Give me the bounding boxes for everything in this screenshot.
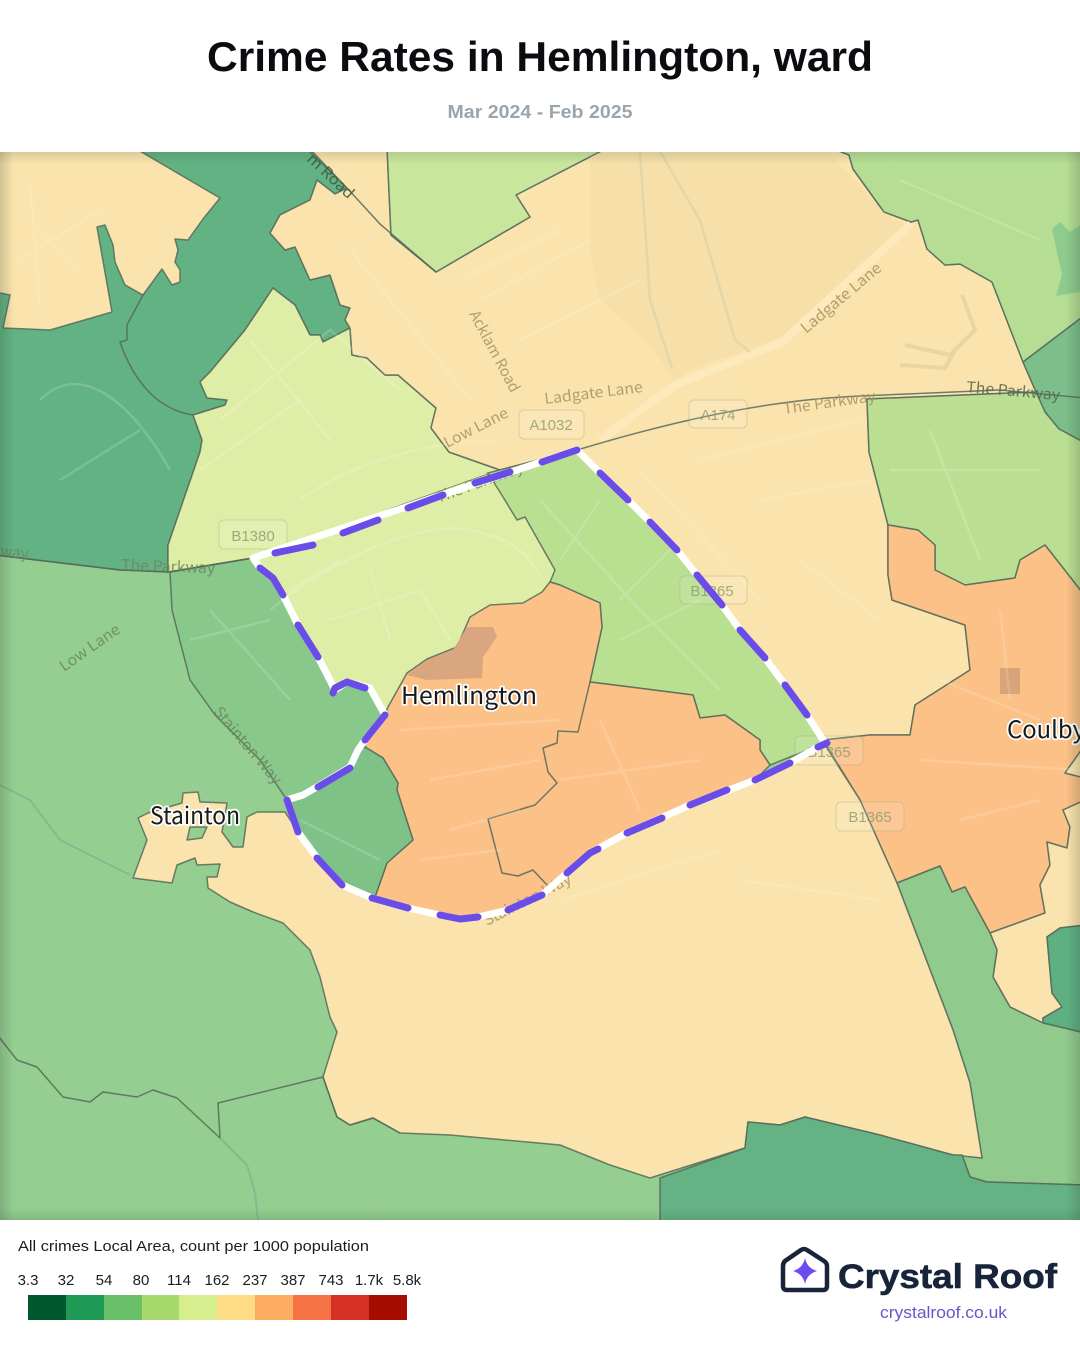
legend tick values: 3.3 bbox=[18, 1272, 38, 1289]
choropleth map bbox=[0, 147, 1080, 1225]
road labels: way bbox=[0, 540, 30, 564]
region: north-west pale green bbox=[168, 288, 500, 572]
region: ward west green bbox=[170, 558, 385, 800]
road shields bbox=[219, 400, 904, 831]
icon: house with star bbox=[783, 1249, 827, 1290]
road labels: Stainton Way bbox=[480, 868, 575, 930]
region: ward mid green bbox=[488, 450, 825, 765]
legend tick values bbox=[18, 1272, 422, 1289]
region: top-left cream bbox=[0, 147, 220, 330]
legend tick values: 162 bbox=[204, 1272, 230, 1289]
website: crystalroof.co.uk bbox=[880, 1304, 1008, 1322]
region: north darker farmland bbox=[590, 153, 888, 214]
region: Stainton green hole bbox=[187, 827, 207, 840]
road shields: A174 bbox=[700, 407, 736, 424]
road labels: Low Lane bbox=[440, 402, 512, 452]
legend title: All crimes Local Area, count per 1000 population bbox=[18, 1238, 369, 1255]
region: north-west dark green bbox=[0, 147, 350, 572]
icon: east darker block bbox=[1000, 668, 1020, 694]
region: east green bbox=[867, 392, 1080, 596]
road shields: B1365 bbox=[807, 744, 851, 761]
region: north cream bbox=[270, 147, 1036, 740]
region: south-east green bbox=[897, 866, 1080, 1185]
road labels: Stainton Way bbox=[209, 702, 287, 789]
road labels: Acklam Road bbox=[465, 306, 525, 396]
legend tick values: 237 bbox=[242, 1272, 268, 1289]
legend tick values: 743 bbox=[318, 1272, 344, 1289]
road labels: The Parkway bbox=[121, 554, 216, 578]
road shields: B1380 bbox=[231, 528, 275, 545]
road shields: A1032 bbox=[529, 417, 573, 434]
legend tick values: 32 bbox=[58, 1272, 74, 1289]
legend tick values: 54 bbox=[96, 1272, 112, 1289]
legend bbox=[18, 1238, 422, 1320]
thin boundaries and streams bbox=[0, 188, 1080, 1220]
region: east cream sliver bbox=[1064, 751, 1080, 778]
region: east orange bbox=[823, 525, 1080, 933]
place labels bbox=[150, 676, 1080, 831]
road texture bbox=[20, 152, 1080, 900]
legend tick values: 387 bbox=[280, 1272, 306, 1289]
road labels: Low Lane bbox=[55, 619, 124, 676]
wordmark: Crystal Roof bbox=[838, 1258, 1058, 1296]
legend tick values: 5.8k bbox=[393, 1272, 422, 1289]
road shields: B1365 bbox=[848, 809, 892, 826]
legend tick values: 1.7k bbox=[355, 1272, 384, 1289]
region: south dark green bbox=[660, 1117, 1080, 1225]
region: ward south-west green bbox=[287, 747, 413, 897]
region: east cream pocket bbox=[990, 800, 1080, 1023]
road labels: Ladgate Lane bbox=[796, 257, 886, 338]
logo: Crystal Roof bbox=[783, 1249, 1058, 1322]
road labels bbox=[0, 148, 1061, 930]
road shields: B1365 bbox=[690, 583, 734, 600]
region: far east green bbox=[1023, 315, 1080, 443]
legend tick values: 114 bbox=[167, 1272, 191, 1289]
region: ward brown patch bbox=[407, 627, 497, 680]
place labels: Stainton bbox=[150, 796, 240, 831]
region: north pale green bbox=[387, 147, 609, 272]
region: north-east dark strip bbox=[1052, 222, 1080, 296]
legend colour bar bbox=[28, 1295, 407, 1320]
region: east dark pocket bbox=[1043, 925, 1080, 1033]
region: ward orange subdivisions bbox=[488, 682, 590, 885]
subtitle: date range: Mar 2024 - Feb 2025 bbox=[448, 101, 632, 122]
region: ward orange bbox=[365, 582, 770, 919]
region: ward pale green bbox=[253, 470, 555, 715]
map edge shading bbox=[0, 152, 1080, 1220]
title: Crime Rates in Hemlington, ward bbox=[207, 33, 873, 80]
place labels: Hemlington bbox=[401, 676, 537, 711]
region: north-east green bbox=[829, 147, 1080, 362]
road labels: The Parkway bbox=[433, 456, 526, 508]
region: south cream bbox=[133, 742, 982, 1178]
road labels: The Parkway bbox=[966, 376, 1061, 405]
ward boundary bbox=[253, 450, 827, 919]
road labels: Ladgate Lane bbox=[543, 376, 644, 409]
legend tick values: 80 bbox=[133, 1272, 149, 1289]
road labels: m Road bbox=[303, 148, 359, 203]
road labels: The Parkway bbox=[782, 385, 877, 419]
